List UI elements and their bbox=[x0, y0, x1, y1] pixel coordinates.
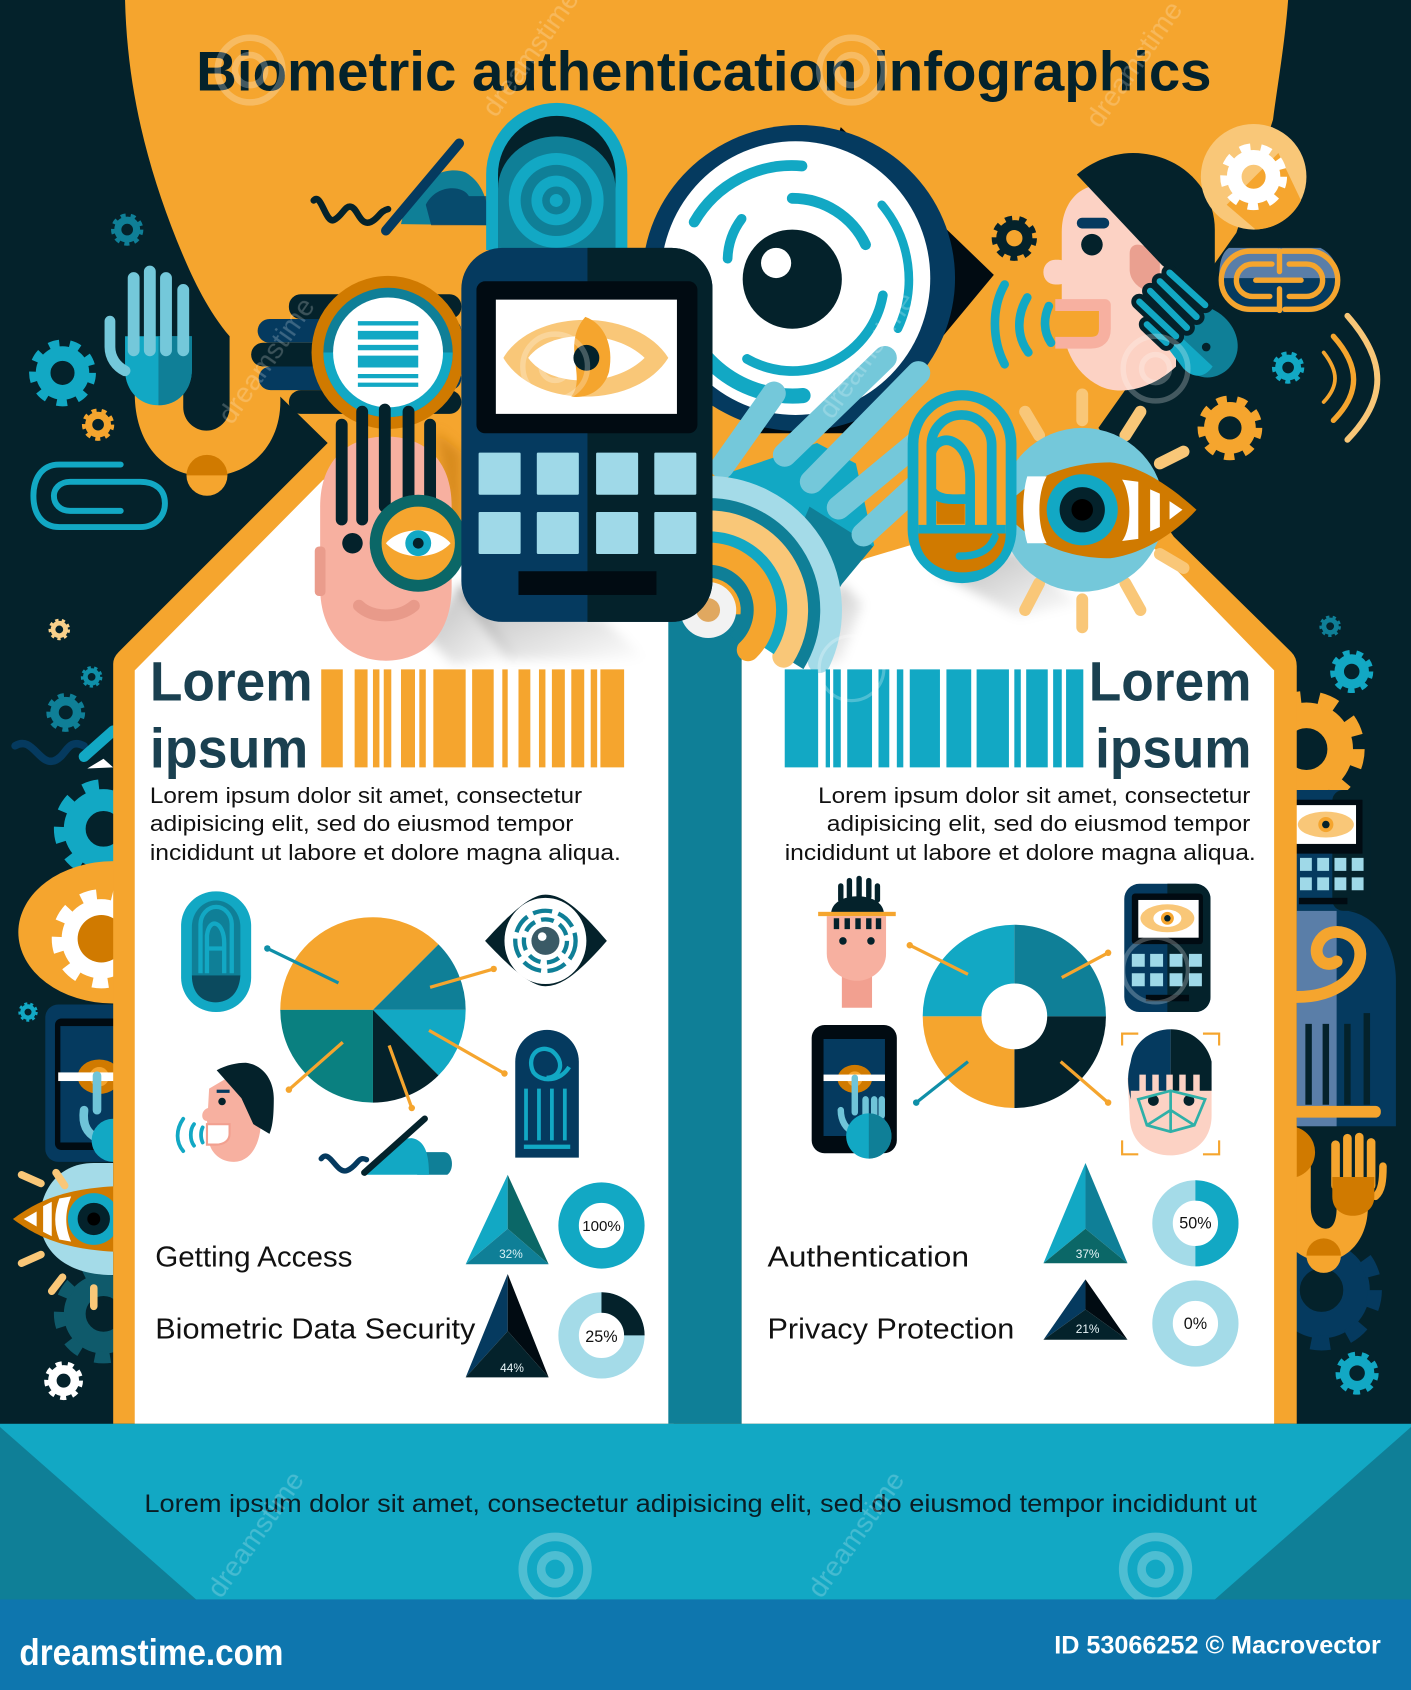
icon: paper clip bbox=[33, 465, 165, 527]
icon: speaking face mini bbox=[178, 1063, 274, 1162]
icon: hand on iris bbox=[722, 358, 921, 647]
side eye bbox=[13, 1163, 140, 1306]
paragraph right: incididunt ut labore et dolore magna aliqua. bbox=[785, 840, 1256, 865]
icon: iris eye mini bbox=[485, 895, 607, 986]
icon: capsule fingerprint bbox=[908, 390, 1016, 583]
gear: teal left large bbox=[33, 344, 92, 402]
bottom left triangle bbox=[0, 1427, 196, 1599]
half disc bbox=[1263, 1126, 1315, 1178]
icon: lock microphone bbox=[1139, 273, 1238, 377]
right side decorations bbox=[1255, 617, 1396, 1392]
orange hand bbox=[1332, 1137, 1383, 1216]
heading left bbox=[150, 650, 313, 779]
pie chart bbox=[264, 917, 508, 1111]
donut 50%: 50% bbox=[1179, 1215, 1212, 1233]
triangle 21%: 21% bbox=[1076, 1322, 1100, 1336]
triangle 32% bbox=[466, 1175, 549, 1264]
gear: dark teal bbox=[49, 695, 83, 730]
gear: orange left small bbox=[84, 410, 112, 439]
icon: signal arcs bbox=[680, 487, 831, 663]
triangle 32%: 32% bbox=[499, 1247, 523, 1261]
orange dot left bbox=[186, 455, 227, 496]
icon: tablet fingerprint bbox=[812, 1025, 897, 1159]
heading left: ipsum bbox=[150, 716, 308, 779]
barcode orange bbox=[321, 669, 624, 767]
footer logo: dreamstime.com bbox=[19, 1632, 283, 1673]
phone keypad bbox=[480, 454, 695, 553]
donut leaders bbox=[907, 942, 1111, 1106]
paragraph left: incididunt ut labore et dolore magna aliqua. bbox=[150, 840, 621, 865]
icon: phone with eye bbox=[461, 248, 713, 622]
icon: eye with rays bbox=[1000, 394, 1196, 627]
heading left: Lorem bbox=[150, 650, 313, 713]
icon: big fingerprint bbox=[486, 103, 627, 250]
heading right: Lorem bbox=[1089, 650, 1251, 713]
orange dot bbox=[1306, 1238, 1341, 1273]
watermark text: dreamstime bbox=[812, 286, 921, 424]
gear: small cream bbox=[50, 620, 69, 639]
icon: knot brain bbox=[1219, 248, 1340, 313]
label: getting access: Getting Access bbox=[155, 1241, 352, 1273]
paragraph right bbox=[785, 783, 1256, 865]
icon: fingerprint arch mini bbox=[515, 1030, 579, 1158]
gear: large teal bbox=[60, 785, 147, 872]
triangle 37%: 37% bbox=[1076, 1247, 1100, 1261]
left side decorations bbox=[13, 620, 208, 1398]
gear: tiny teal right bbox=[1321, 617, 1340, 636]
gear: bottom teal right bbox=[1338, 1354, 1376, 1392]
sound waves bbox=[995, 285, 1051, 364]
paragraph left: adipisicing elit, sed do eiusmod tempor bbox=[150, 811, 574, 836]
gear: dark teal top left bbox=[113, 215, 141, 244]
gear: bottom dark teal bbox=[60, 1270, 147, 1357]
right white panel bbox=[742, 507, 1274, 1424]
side fingerprint arch bbox=[1272, 911, 1396, 1126]
gear: large white bbox=[58, 895, 145, 982]
gear: tiny teal bbox=[19, 1004, 37, 1021]
heading right: ipsum bbox=[1095, 716, 1251, 779]
triangle 44% bbox=[466, 1274, 549, 1377]
gear: small white bbox=[47, 1364, 81, 1398]
title: Biometric authentication infographics bbox=[196, 40, 1212, 103]
gear: small teal right bbox=[1333, 653, 1371, 690]
icon: document scanner bbox=[312, 276, 465, 429]
bottom band bbox=[0, 1424, 1411, 1599]
triangle 21% bbox=[1043, 1279, 1128, 1340]
label: authentication: Authentication bbox=[767, 1241, 969, 1273]
barcode teal bbox=[785, 669, 1083, 767]
icon: capsule mini bbox=[181, 891, 251, 1012]
orange blob bbox=[18, 861, 208, 1003]
donut 0%: 0% bbox=[1184, 1315, 1207, 1333]
donut 25% bbox=[569, 1303, 634, 1368]
gear: orange right bbox=[1201, 399, 1258, 456]
side tablet bbox=[45, 1005, 142, 1162]
orange top shape and panel border bbox=[113, 0, 1297, 1424]
gear: big orange right bbox=[1255, 698, 1358, 800]
gear: teal right small bbox=[1274, 353, 1302, 382]
watermark text: dreamstime bbox=[200, 1465, 310, 1603]
triangle 44%: 44% bbox=[500, 1361, 524, 1375]
pie leaders bbox=[264, 945, 508, 1111]
icon: big iris eye bbox=[642, 125, 994, 433]
icon: face scan head bbox=[315, 410, 467, 661]
left white panel bbox=[135, 480, 674, 1424]
gear: dark beside head bbox=[994, 218, 1034, 258]
centre teal column bbox=[668, 614, 742, 1424]
pen bbox=[84, 731, 113, 768]
icon: gear bubble bbox=[1201, 124, 1306, 230]
icon: signature pen mini bbox=[321, 1119, 452, 1175]
watermark text bbox=[200, 0, 1188, 1603]
label: privacy protection: Privacy Protection bbox=[767, 1314, 1014, 1346]
donut 100%: 100% bbox=[582, 1218, 621, 1235]
paragraph left bbox=[150, 783, 621, 865]
paragraph right: Lorem ipsum dolor sit amet, consectetur bbox=[818, 783, 1251, 808]
paragraph right: adipisicing elit, sed do eiusmod tempor bbox=[827, 811, 1251, 836]
sound arcs right bbox=[1324, 316, 1377, 440]
donut 0% bbox=[1163, 1291, 1228, 1356]
panel: right bbox=[767, 650, 1256, 1356]
gear: small teal bbox=[82, 667, 101, 686]
side phone bbox=[1272, 790, 1370, 911]
gear: navy right bbox=[1268, 1237, 1375, 1343]
icon: signature pen bbox=[314, 143, 490, 231]
donut chart bbox=[907, 925, 1111, 1108]
paragraph left: Lorem ipsum dolor sit amet, consectetur bbox=[150, 783, 583, 808]
bottom right triangle bbox=[1215, 1427, 1411, 1599]
footer bbox=[0, 1599, 1411, 1690]
orange U arm bbox=[1289, 1142, 1368, 1261]
bottom text: Lorem ipsum dolor sit amet, consectetur adipisicing elit, sed do eiusmod tempor incididunt ut bbox=[144, 1491, 1257, 1518]
donut 100% bbox=[569, 1193, 634, 1258]
watermark text: dreamstime bbox=[211, 292, 321, 429]
watermark swirls bbox=[218, 38, 1188, 1602]
icon: phone mini bbox=[1124, 884, 1211, 1012]
icon: face recognition bbox=[1122, 1029, 1219, 1155]
signature squiggle bbox=[15, 744, 84, 761]
icon: speaking head bbox=[995, 153, 1215, 390]
icon: man with visor bbox=[818, 878, 896, 1008]
donut 25%: 25% bbox=[585, 1328, 618, 1346]
footer credit: ID 53066252 © Macrovector bbox=[1054, 1632, 1381, 1659]
gear: white bubble gear bbox=[1224, 147, 1283, 206]
heading right bbox=[1089, 650, 1251, 779]
icon: hand outline fingers bbox=[110, 272, 192, 405]
panel: left bbox=[150, 650, 634, 1377]
donut 50% bbox=[1163, 1190, 1228, 1256]
triangle 37% bbox=[1043, 1163, 1128, 1263]
label: biometric data security: Biometric Data Security bbox=[155, 1314, 476, 1346]
gear hole bbox=[78, 915, 125, 962]
icon: dark hand behind scanner bbox=[251, 294, 461, 414]
watermark text: dreamstime bbox=[801, 1465, 910, 1603]
shadows bbox=[426, 431, 1078, 664]
